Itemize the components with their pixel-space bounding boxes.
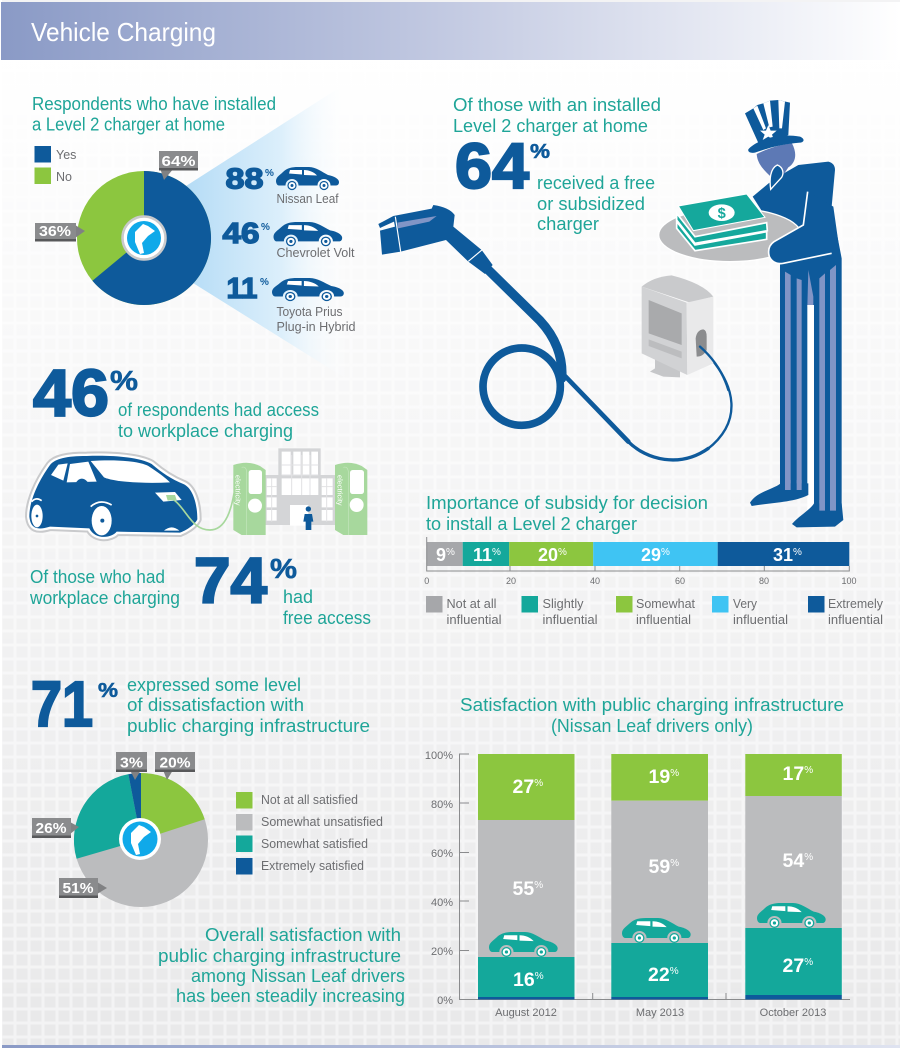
- text: received a free: [537, 173, 655, 234]
- stacked bar chart: [424, 537, 857, 586]
- blue cone callout: [186, 84, 345, 378]
- big number 64%: %: [530, 141, 550, 163]
- column: August 2012: 55: [512, 878, 534, 900]
- legend: satisfaction: Extremely satisfied: [261, 859, 364, 873]
- tag: 51%: [59, 878, 107, 898]
- big number 46%: [33, 356, 138, 430]
- heading: importance: [426, 493, 708, 534]
- stat: Chevrolet Volt 46%: Chevrolet Volt: [276, 246, 355, 260]
- text: access to workplace charging: to workplace charging: [118, 421, 293, 441]
- legend: yes no: Yes: [56, 148, 76, 162]
- text: expressed dissatisfaction: [127, 675, 370, 736]
- big number 74%: %: [270, 553, 297, 584]
- tag: 26%: 26%: [36, 820, 66, 837]
- tag: 26%: [32, 818, 79, 838]
- column: August 2012: [478, 754, 574, 1019]
- legend: influence: influential: [733, 613, 788, 627]
- column: October 2013: %: [804, 765, 813, 776]
- pie chart: satisfaction: [74, 773, 208, 907]
- column: May 2013: %: [670, 966, 679, 977]
- text: received a free: or subsidized: [537, 194, 645, 214]
- panel: workplace charging: [29, 356, 371, 628]
- stacked bar chart: 11: [473, 545, 492, 565]
- heading line 2: Level 2 charger at home: [453, 116, 648, 136]
- heading: of those with installed: Of those with an installed: [453, 95, 661, 115]
- stacked bar chart: %: [558, 547, 567, 558]
- stacked column chart: 20%: [431, 946, 453, 958]
- legend: satisfaction: Somewhat satisfied: [261, 837, 368, 851]
- panel: home charger installation: [32, 84, 356, 378]
- column: May 2013: 19: [648, 766, 670, 788]
- legend: influence: influential: [828, 613, 883, 627]
- stat: Nissan Leaf 88%: %: [265, 168, 274, 179]
- stacked column chart: 100%: [425, 750, 453, 762]
- text: of those who had: Of those who had: [30, 567, 165, 587]
- tag: 36%: [35, 223, 85, 242]
- text: expressed dissatisfaction: public charging infrastructure: [127, 716, 370, 736]
- text: had free access: [283, 587, 371, 628]
- heading: importance: Importance of subsidy for decision: [426, 493, 708, 513]
- tag: 3%: [116, 752, 147, 780]
- stacked bar chart: 100: [841, 576, 857, 586]
- column: May 2013: 22: [648, 964, 670, 986]
- text: expressed dissatisfaction: expressed some level: [127, 675, 301, 695]
- legend: influence: influential: [542, 613, 598, 627]
- column: October 2013: %: [804, 852, 813, 863]
- stacked bar chart: %: [793, 547, 802, 558]
- panel: satisfaction over time: [425, 695, 850, 1019]
- legend: influence: Extremely: [828, 597, 884, 611]
- stacked bar chart: 20: [506, 576, 516, 586]
- stacked bar chart: 20: [538, 545, 558, 565]
- big number 46%: %: [110, 365, 138, 396]
- big number 71%: 71: [31, 668, 93, 740]
- stat: Nissan Leaf 88%: [226, 164, 339, 206]
- text: overall satisfaction: among Nissan Leaf drivers: [191, 966, 405, 986]
- stat: Toyota Prius 11%: %: [260, 277, 269, 288]
- column: August 2012: 16: [513, 969, 535, 991]
- column: October 2013: 17: [782, 763, 804, 785]
- bottom band: [2, 1045, 900, 1048]
- column: May 2013: [611, 754, 708, 1019]
- stat: Toyota Prius 11%: Toyota Prius: [276, 305, 342, 319]
- text: expressed dissatisfaction: of dissatisfaction with: [127, 695, 304, 715]
- column: May 2013: May 2013: [636, 1007, 684, 1019]
- stat: Toyota Prius 11%: Plug-in Hybrid: [276, 320, 356, 334]
- stacked bar chart: 40: [590, 576, 600, 586]
- legend: satisfaction: Not at all satisfied: [261, 793, 358, 807]
- legend: influence: influential: [446, 613, 502, 627]
- stacked column chart: 60%: [431, 848, 453, 860]
- illustration: Uncle Sam with money: [659, 100, 843, 527]
- illustration: charging plug and cable: [378, 205, 731, 460]
- stacked bar chart: %: [661, 547, 670, 558]
- heading: respondents: Respondents who have installed: [32, 94, 276, 114]
- text: access to workplace charging: of respondents had access: [118, 400, 319, 420]
- big number 46%: 46: [33, 356, 109, 430]
- text: overall satisfaction: has been steadily increasing: [176, 986, 405, 1006]
- tag: 20%: 20%: [160, 754, 190, 772]
- legend: satisfaction: Somewhat unsatisfied: [261, 815, 383, 829]
- illustration: car charging at building: [29, 448, 367, 537]
- text: had free access: had: [283, 587, 313, 607]
- stacked column chart: 80%: [431, 799, 453, 811]
- text: received a free: charger: [537, 214, 599, 234]
- illustration: Uncle Sam with money: $: [718, 206, 726, 222]
- tag: 36%: 36%: [39, 223, 71, 240]
- stacked bar chart: %: [492, 547, 501, 558]
- header banner: [1, 2, 900, 60]
- tag: 3%: 3%: [120, 754, 143, 772]
- heading: satisfaction with public charging: Satisfaction with public charging infrastructure: [460, 695, 844, 715]
- column: May 2013: 59: [648, 856, 670, 878]
- panel: subsidized charger: [378, 95, 843, 527]
- column: May 2013: %: [670, 858, 679, 869]
- stacked column chart: [425, 750, 850, 1019]
- big number 71%: %: [98, 680, 118, 702]
- tag: 20%: [155, 752, 195, 780]
- panel: importance of subsidy: [424, 493, 884, 627]
- stat: Chevrolet Volt 46%: %: [261, 222, 270, 233]
- heading: satisfaction with public charging: (Nissan Leaf drivers only): [551, 716, 753, 736]
- illustration: wall charger: [642, 275, 728, 390]
- column: August 2012: %: [535, 971, 544, 982]
- illustration: car charging at building: electricity: [234, 475, 243, 506]
- heading: importance: to install a Level 2 charger: [426, 514, 637, 534]
- stacked bar chart: 0: [424, 576, 429, 586]
- stat: Chevrolet Volt 46%: [222, 218, 355, 260]
- column: October 2013: %: [804, 957, 813, 968]
- legend: influence: influential: [636, 613, 691, 627]
- column: August 2012: %: [534, 880, 543, 891]
- text: had free access: free access: [283, 608, 371, 628]
- legend: influence: Somewhat: [636, 597, 696, 611]
- stacked bar chart: 29: [641, 545, 661, 565]
- stacked column chart: 0%: [437, 995, 453, 1007]
- legend: yes no: No: [56, 170, 72, 184]
- stacked column chart: 40%: [431, 897, 453, 909]
- legend: influence: Not at all: [446, 597, 496, 611]
- text: overall satisfaction: public charging infrastructure: [158, 946, 401, 966]
- stacked bar chart: 9: [436, 545, 446, 565]
- stacked bar chart: 31: [773, 545, 793, 565]
- stat: Nissan Leaf 88%: Nissan Leaf: [276, 192, 339, 206]
- column: October 2013: [745, 754, 842, 1019]
- text: overall satisfaction: Overall satisfaction with: [205, 925, 401, 945]
- legend: satisfaction: [236, 792, 383, 874]
- panel: dissatisfaction: [31, 668, 405, 1006]
- column: October 2013: 54: [782, 850, 804, 872]
- column: May 2013: %: [670, 768, 679, 779]
- title: Vehicle Charging: [31, 17, 216, 47]
- text: of those who had: workplace charging: [29, 588, 180, 608]
- big number 74%: 74: [194, 544, 267, 616]
- stat: Nissan Leaf 88%: 88: [226, 164, 264, 196]
- heading: satisfaction with public charging: [460, 695, 844, 736]
- stacked bar chart: %: [446, 547, 455, 558]
- illustration: car charging at building: electricity: [335, 475, 344, 506]
- stat: Toyota Prius 11%: 11: [226, 273, 258, 305]
- big number 74%: [194, 544, 297, 616]
- column: October 2013: October 2013: [760, 1007, 826, 1019]
- big number 64%: 64: [455, 130, 529, 202]
- stat: Chevrolet Volt 46%: 46: [222, 218, 260, 250]
- tag: 51%: 51%: [62, 880, 94, 897]
- legend: influence: Slightly: [542, 597, 584, 611]
- tag: 64%: [159, 151, 198, 180]
- column: August 2012: %: [534, 778, 543, 789]
- legend: yes no: [34, 146, 76, 184]
- text: received a free: received a free: [537, 173, 655, 193]
- heading line 2: a Level 2 charger at home: [32, 114, 225, 134]
- column: August 2012: 27: [512, 776, 534, 798]
- tag: 64%: 64%: [162, 153, 196, 170]
- legend: influence: [426, 596, 884, 627]
- text: overall satisfaction: [158, 925, 405, 1006]
- stacked bar chart: 60: [675, 576, 685, 586]
- column: August 2012: August 2012: [495, 1007, 557, 1019]
- text: of those who had: [29, 567, 180, 608]
- column: October 2013: 27: [782, 955, 804, 977]
- pie chart: installed: [77, 171, 211, 305]
- stat: Toyota Prius 11%: [226, 273, 356, 334]
- stacked bar chart: 80: [759, 576, 769, 586]
- text: access to workplace charging: [118, 400, 319, 441]
- legend: influence: Very: [733, 597, 758, 611]
